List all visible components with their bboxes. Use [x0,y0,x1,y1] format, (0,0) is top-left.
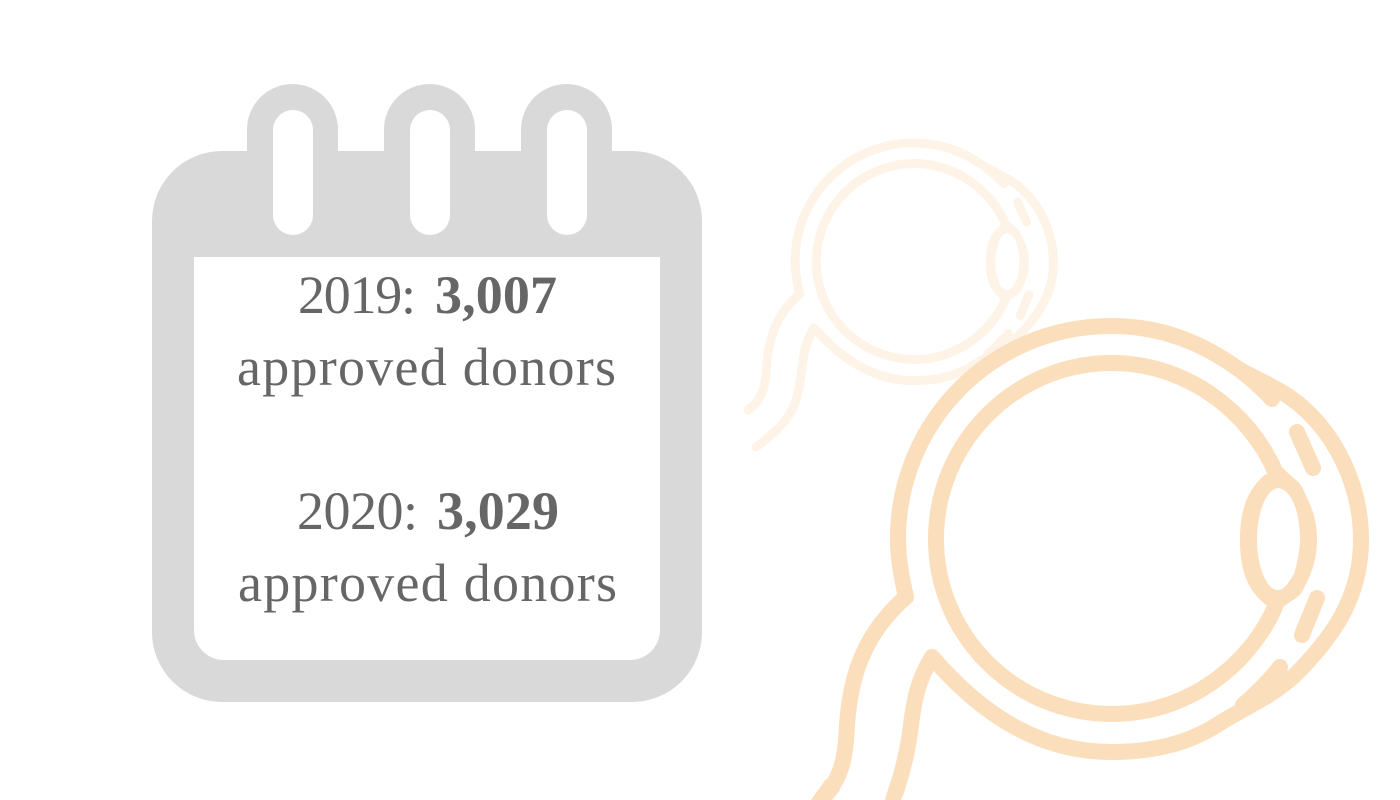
sclera, retina and optic nerve strokes [833,326,1361,788]
text: 2020 approved donors: 3,029 [437,481,559,541]
text: 2019 approved donors: 3,007 [435,265,557,325]
text: 2020 approved donors: approved donors [238,553,617,613]
calendar body [152,151,702,702]
icon: small faded eye [748,143,1053,447]
text: 2020 approved donors [238,481,617,613]
lower junction wedge [1243,662,1294,705]
upper junction wedge [1240,366,1287,402]
icon: large eye [811,326,1361,800]
text: 2019 approved donors [237,265,616,397]
text: 2019 approved donors: approved donors [237,337,616,397]
ring slots [273,110,587,235]
icon: calendar [152,84,702,702]
optic nerve ends at the frame edge [811,779,905,800]
calendar rings [247,84,612,160]
text: 2019 approved donors: 2019: [298,265,416,325]
text: 2020 approved donors: 2020: [297,481,418,541]
lens [1240,468,1317,607]
